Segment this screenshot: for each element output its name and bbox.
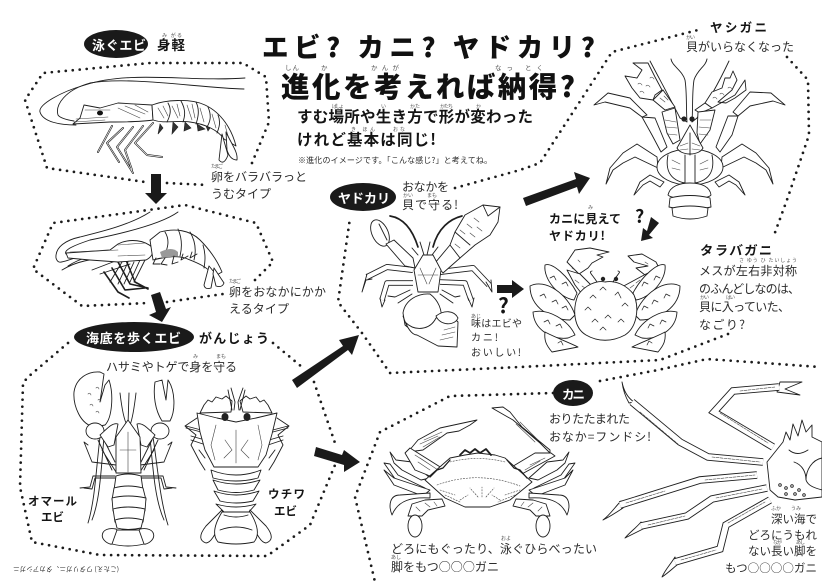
label: crab [553, 380, 593, 406]
illustration: giant spider crab [603, 382, 822, 577]
label: slipper lobster: エビ [274, 503, 297, 519]
text: folded belly called fundoshi: おりたたまれた [549, 410, 630, 427]
illustration: swimming crab [384, 407, 575, 537]
subtitle: か [476, 103, 481, 110]
arrow: to hermit crab [292, 335, 359, 388]
label: swimming shrimp: み がる [162, 32, 182, 39]
text: protected by claws and spines: まも [216, 353, 226, 360]
label: walking shrimp: 海底を歩くエビ [86, 328, 181, 347]
title: とく [525, 62, 543, 72]
subtitle: おな [393, 126, 405, 133]
text: no longer needs a shell: 貝がいらなくなった [686, 38, 794, 55]
text: lays scattered eggs [211, 163, 307, 202]
text: protects belly with shell: おなかを [402, 178, 449, 195]
label: swimming shrimp: 泳ぐエビ [92, 35, 146, 54]
text: burrows and swims with flat legs: 脚をもつ○○○ガニ [391, 558, 499, 575]
subtitle: き ほん [351, 126, 375, 133]
text: asymmetric apron of king crab: さ ゆう ひ たいしょう [739, 257, 797, 264]
text: protects belly with shell: かい [403, 192, 413, 199]
label: swimming shrimp: 身軽 [157, 34, 186, 54]
label: crab-like hermit crab [549, 204, 621, 244]
text: tastes like shrimp and crab: 味はエビや [471, 315, 522, 330]
text: asymmetric apron of king crab: 貝に入っていた、 [699, 298, 790, 315]
label: omar lobster: オマール [28, 493, 78, 509]
question mark: hermit crab to king crab: ? [498, 290, 509, 320]
text: protects belly with shell [402, 178, 458, 213]
label: slipper lobster: ウチワ [268, 486, 305, 502]
text: asymmetric apron of king crab: はい [726, 294, 735, 301]
subtitle [297, 103, 533, 150]
title: かんが [371, 62, 400, 72]
illustration: king crab [530, 248, 680, 352]
text: long legs that don't sink in mud: あし [796, 539, 805, 546]
text: carries eggs on belly: たまご [229, 278, 241, 285]
illustration: slipper lobster [185, 388, 289, 544]
text: long legs that don't sink in mud: うみ [791, 505, 801, 512]
text: tastes like shrimp and crab: カニ! [471, 329, 498, 344]
text: lays scattered eggs: うむタイプ [211, 185, 271, 202]
label: coconut crab: ヤシガニ [710, 17, 767, 36]
label: omar lobster: エビ [41, 509, 64, 525]
text: tastes like shrimp and crab [471, 313, 522, 359]
label: crab-like hermit crab: カニに見えて [549, 210, 621, 227]
question mark: coconut crab: ? [635, 203, 644, 229]
illustration: coconut crab [594, 59, 785, 219]
text: carries eggs on belly: えるタイプ [229, 300, 289, 317]
subtitle: い [381, 103, 386, 110]
arrow: to coconut crab [523, 172, 590, 206]
text: protects belly with shell: まも [427, 192, 437, 199]
label: hermit crab: ヤドカリ [338, 188, 390, 207]
text: protects belly with shell: 貝で守る! [402, 196, 458, 213]
text: asymmetric apron of king crab: かい [700, 294, 709, 301]
label: omar lobster [28, 493, 78, 525]
text: asymmetric apron of king crab: なごり? [699, 316, 745, 333]
illustration: hermit crab [362, 205, 500, 347]
label: crab-like hermit crab: み [588, 204, 593, 211]
title: エビ? カニ? ヤドカリ? [262, 26, 595, 65]
illustration: shrimp carrying eggs [56, 212, 224, 298]
subtitle: すむ場所や生き方で形が変わった [297, 105, 533, 127]
illustration: American lobster [74, 372, 176, 546]
title: しん [285, 62, 300, 72]
upside-down answer: (こたえ) ワタリガニ、タカアシガニ [13, 565, 119, 575]
text: long legs that don't sink in mud: もつ○○○○ガニ [725, 560, 817, 576]
text: asymmetric apron of king crab: メスが左右非対称 [699, 262, 797, 279]
arrow: down from swimming shrimp [145, 174, 167, 204]
label: walking shrimp: がんじょう [199, 328, 269, 347]
title: か [321, 62, 328, 72]
text: protected by claws and spines: ハサミやトゲで身を守る [106, 358, 237, 375]
subtitle: けれど基本は同じ! [297, 128, 436, 150]
label: crab-like hermit crab: ヤドカリ! [549, 227, 605, 244]
text: burrows and swims with flat legs [391, 535, 597, 575]
subtitle: ばしょ [332, 103, 344, 110]
text: no longer needs a shell: かい [686, 34, 695, 41]
text: carries eggs on belly [229, 278, 326, 317]
title: 進化を考えれば納得? [281, 65, 575, 106]
subtitle: かたち [440, 103, 453, 110]
arrow: to true crab [314, 447, 360, 472]
label: slipper lobster [268, 486, 305, 519]
text: folded belly called fundoshi [549, 410, 651, 445]
label: hermit crab [330, 183, 396, 211]
subtitle: かた [410, 103, 420, 110]
illustration: swimming shrimp [40, 77, 245, 173]
text: lays scattered eggs: たまご [211, 163, 223, 170]
text: burrows and swims with flat legs: あし [391, 554, 401, 561]
text: long legs that don't sink in mud [725, 505, 818, 576]
text: long legs that don't sink in mud: ない長い脚を [748, 543, 817, 559]
text: protected by claws and spines: み [193, 353, 198, 360]
arrow: down to walking shrimp [149, 292, 171, 322]
title [262, 26, 595, 106]
text: tastes like shrimp and crab: おいしい! [471, 344, 521, 359]
text: long legs that don't sink in mud: ふか [771, 505, 781, 512]
text: long legs that don't sink in mud: 深い海で [771, 511, 817, 527]
text: folded belly called fundoshi: おなか=フンドシ! [549, 428, 651, 445]
note: ※進化のイメージです。「こんな感じ?」と考えてね。 [298, 155, 492, 166]
label: king crab: タラバガニ [699, 240, 773, 259]
arrow: coconut crab to king crab [641, 217, 659, 241]
text: long legs that don't sink in mud: なが [773, 539, 782, 546]
arrow: hermit crab to king crab [497, 280, 524, 298]
text: burrows and swims with flat legs: およ [501, 535, 511, 542]
title: なっ [495, 62, 513, 72]
text: lays scattered eggs: 卵をバラバラっと [211, 168, 307, 185]
text: asymmetric apron of king crab: のふんどしなのは、 [699, 280, 800, 297]
text: burrows and swims with flat legs: どろにもぐったり、泳ぐひらべったい [391, 540, 597, 557]
text: tastes like shrimp and crab: あじ [471, 313, 481, 320]
label: swimming shrimp [84, 30, 186, 58]
text: carries eggs on belly: 卵をおなかにかか [229, 283, 326, 300]
text: asymmetric apron of king crab [699, 257, 800, 333]
label: crab: カニ [562, 384, 585, 403]
text: long legs that don't sink in mud: どろにうもれ [748, 527, 818, 543]
label: walking shrimp [74, 322, 269, 352]
